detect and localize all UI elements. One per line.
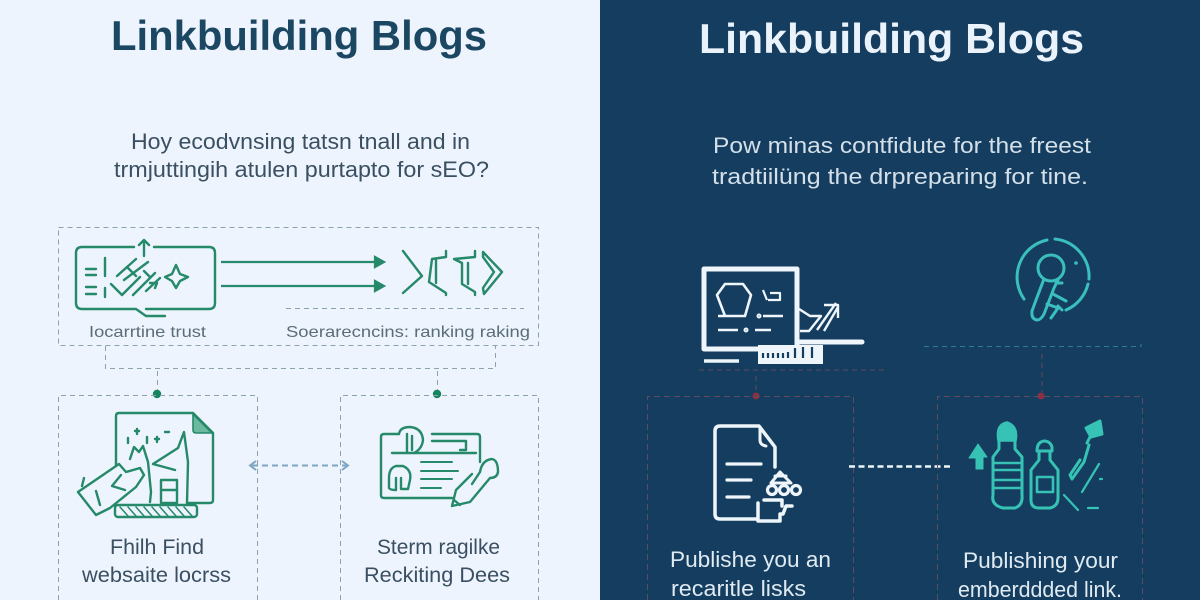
label: embedded link	[958, 548, 1122, 600]
card: find website	[58, 396, 258, 600]
label: steps: Reckiting Dees	[364, 564, 510, 587]
icon: key in ring	[1017, 239, 1089, 320]
icon: monitor with growth arrow	[704, 269, 862, 364]
left intro text: trmjuttingih atulen purtapto for sEO?	[114, 157, 489, 182]
dot connector left	[153, 390, 161, 398]
right intro text	[712, 133, 1091, 189]
red dashed connectors	[699, 354, 1042, 392]
icon: document with hand	[78, 413, 213, 517]
left title: Linkbuilding Blogs	[111, 12, 487, 59]
label: steps: Sterm ragilke	[377, 536, 500, 559]
dot connector right	[433, 390, 441, 398]
dot connector dark left	[752, 392, 760, 400]
label: trust: Iocarrtine trust	[89, 324, 207, 341]
card: embedded link	[938, 396, 1142, 600]
label: embedded link: Publishing your	[963, 548, 1118, 573]
right intro text: tradtiilüng the drpreparing for tine.	[712, 164, 1088, 189]
icon: trust screen	[76, 240, 215, 316]
card: steps	[340, 396, 538, 600]
panel: right dark	[600, 0, 1200, 600]
label: steps	[364, 536, 510, 587]
bidirectional arrow	[250, 461, 348, 470]
card: publish article	[648, 396, 854, 600]
left intro text: Hoy ecodvnsing tatsn tnall and in	[131, 129, 470, 154]
teal dashed line	[924, 344, 1141, 346]
label: find website: websaite locrss	[81, 564, 231, 587]
right intro text: Pow minas contfidute for the freest	[713, 133, 1091, 158]
panel: left light	[0, 0, 600, 600]
icon: bottles and tools	[969, 421, 1102, 510]
label: find website: Fhilh Find	[110, 536, 204, 559]
label: ranking: Soerarecncins: ranking raking	[286, 324, 530, 341]
label: publish article	[670, 547, 831, 600]
icon: document with cluster	[715, 426, 800, 521]
label: publish article: Publishe you an	[670, 547, 831, 572]
left intro text	[114, 129, 489, 182]
dot connector dark right	[1038, 392, 1044, 400]
top dashed flow box	[58, 228, 538, 390]
arrows to ranking	[221, 257, 384, 291]
label: find website	[81, 536, 231, 587]
icon: ranking chevrons	[403, 251, 502, 295]
white dashed connector	[849, 465, 953, 468]
icon: card with pencil	[381, 427, 498, 506]
right title: Linkbuilding Blogs	[699, 15, 1084, 62]
